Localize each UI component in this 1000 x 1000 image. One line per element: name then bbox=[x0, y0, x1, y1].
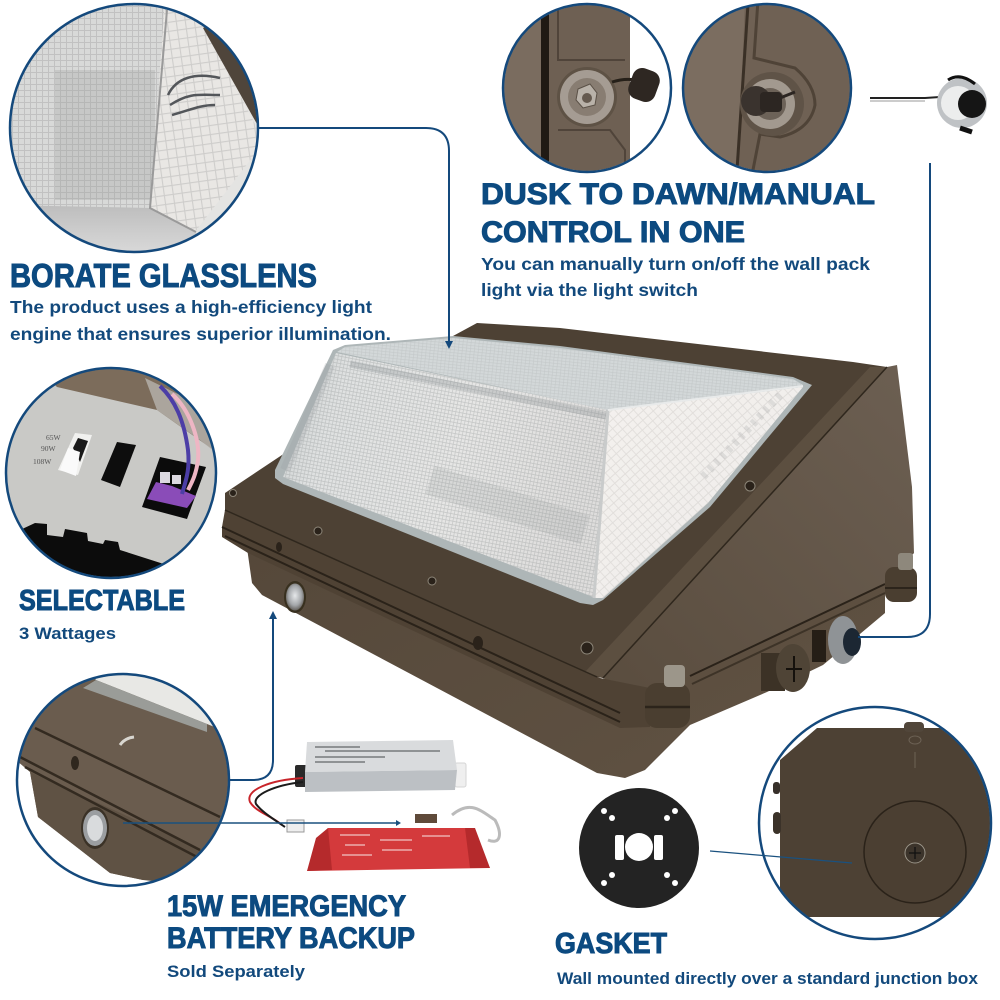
heading: borate glasslens: BORATE GLASSLENS bbox=[10, 257, 317, 294]
heading: dusk to dawn: CONTROL IN ONE bbox=[481, 216, 745, 249]
callout line: gasket bbox=[710, 851, 852, 863]
circle: lens close-up bbox=[8, 2, 260, 254]
bottom cut-outs bbox=[23, 523, 162, 577]
lens front facet bbox=[283, 353, 608, 597]
circle: wattage selector: 108W bbox=[33, 457, 52, 466]
lens top facet bbox=[337, 338, 803, 410]
text: sold separately: Sold Separately bbox=[167, 962, 306, 981]
glass lens bbox=[275, 336, 812, 605]
battery inverter: red driver bbox=[307, 828, 490, 871]
terminal block bbox=[142, 457, 206, 519]
heading: gasket: GASKET bbox=[555, 928, 668, 960]
circle: switch close-up with cap open bbox=[500, 0, 680, 180]
circle: switch close-up with cap closed bbox=[680, 0, 860, 180]
heading: dusk to dawn: DUSK TO DAWN/MANUAL bbox=[481, 178, 875, 211]
text: gasket description: Wall mounted directly over a standard junction box bbox=[557, 970, 979, 988]
text: lens description: The product uses a high-efficiency light bbox=[10, 297, 372, 317]
corner bolt front bbox=[645, 665, 690, 728]
housing flange bbox=[222, 510, 885, 728]
circle: wattage selector: 90W bbox=[41, 444, 56, 453]
callout arrow: lens bbox=[258, 128, 453, 349]
bezel screws bbox=[230, 481, 755, 654]
circle: button close-up bbox=[10, 670, 235, 895]
circle: wattage selector: 65W bbox=[46, 433, 62, 442]
heading: dusk to dawn bbox=[481, 178, 875, 249]
callout arrow: button bbox=[228, 611, 277, 780]
battery inverter: silver box bbox=[295, 740, 466, 792]
heading: emergency backup: 15W EMERGENCY bbox=[167, 890, 406, 923]
icon: gasket plate bbox=[579, 788, 699, 908]
text: switch description bbox=[481, 254, 870, 300]
tilted front bezel bbox=[225, 323, 887, 678]
circle: wattage selector bbox=[4, 366, 218, 580]
heading: emergency backup: BATTERY BACKUP bbox=[167, 922, 415, 955]
heading: emergency backup bbox=[167, 890, 415, 955]
selector slot bbox=[58, 433, 92, 475]
right side panel bbox=[603, 365, 914, 690]
emergency driver wires bbox=[249, 778, 499, 841]
bezel chamfer bbox=[585, 367, 887, 678]
text: lens description bbox=[10, 297, 391, 344]
main product: wall pack light bbox=[222, 323, 917, 778]
callout line: button to battery bbox=[123, 820, 401, 826]
circle: junction box close-up bbox=[755, 700, 995, 945]
text: switch description: You can manually turn on/off the wall pack bbox=[481, 254, 870, 274]
text: switch description: light via the light switch bbox=[481, 280, 698, 300]
text: 3 wattages: 3 Wattages bbox=[19, 624, 116, 643]
lens right facet bbox=[594, 387, 803, 598]
text: lens description: engine that ensures superior illumination. bbox=[10, 324, 391, 344]
side plug and photocell bbox=[761, 616, 861, 692]
callout line: photocell bbox=[858, 163, 930, 637]
corner bolt right bbox=[885, 553, 917, 602]
lower housing box bbox=[247, 548, 885, 778]
push button bbox=[284, 581, 306, 613]
icon: photocell switch with cable bbox=[870, 77, 987, 132]
heading: selectable: SELECTABLE bbox=[19, 585, 185, 617]
